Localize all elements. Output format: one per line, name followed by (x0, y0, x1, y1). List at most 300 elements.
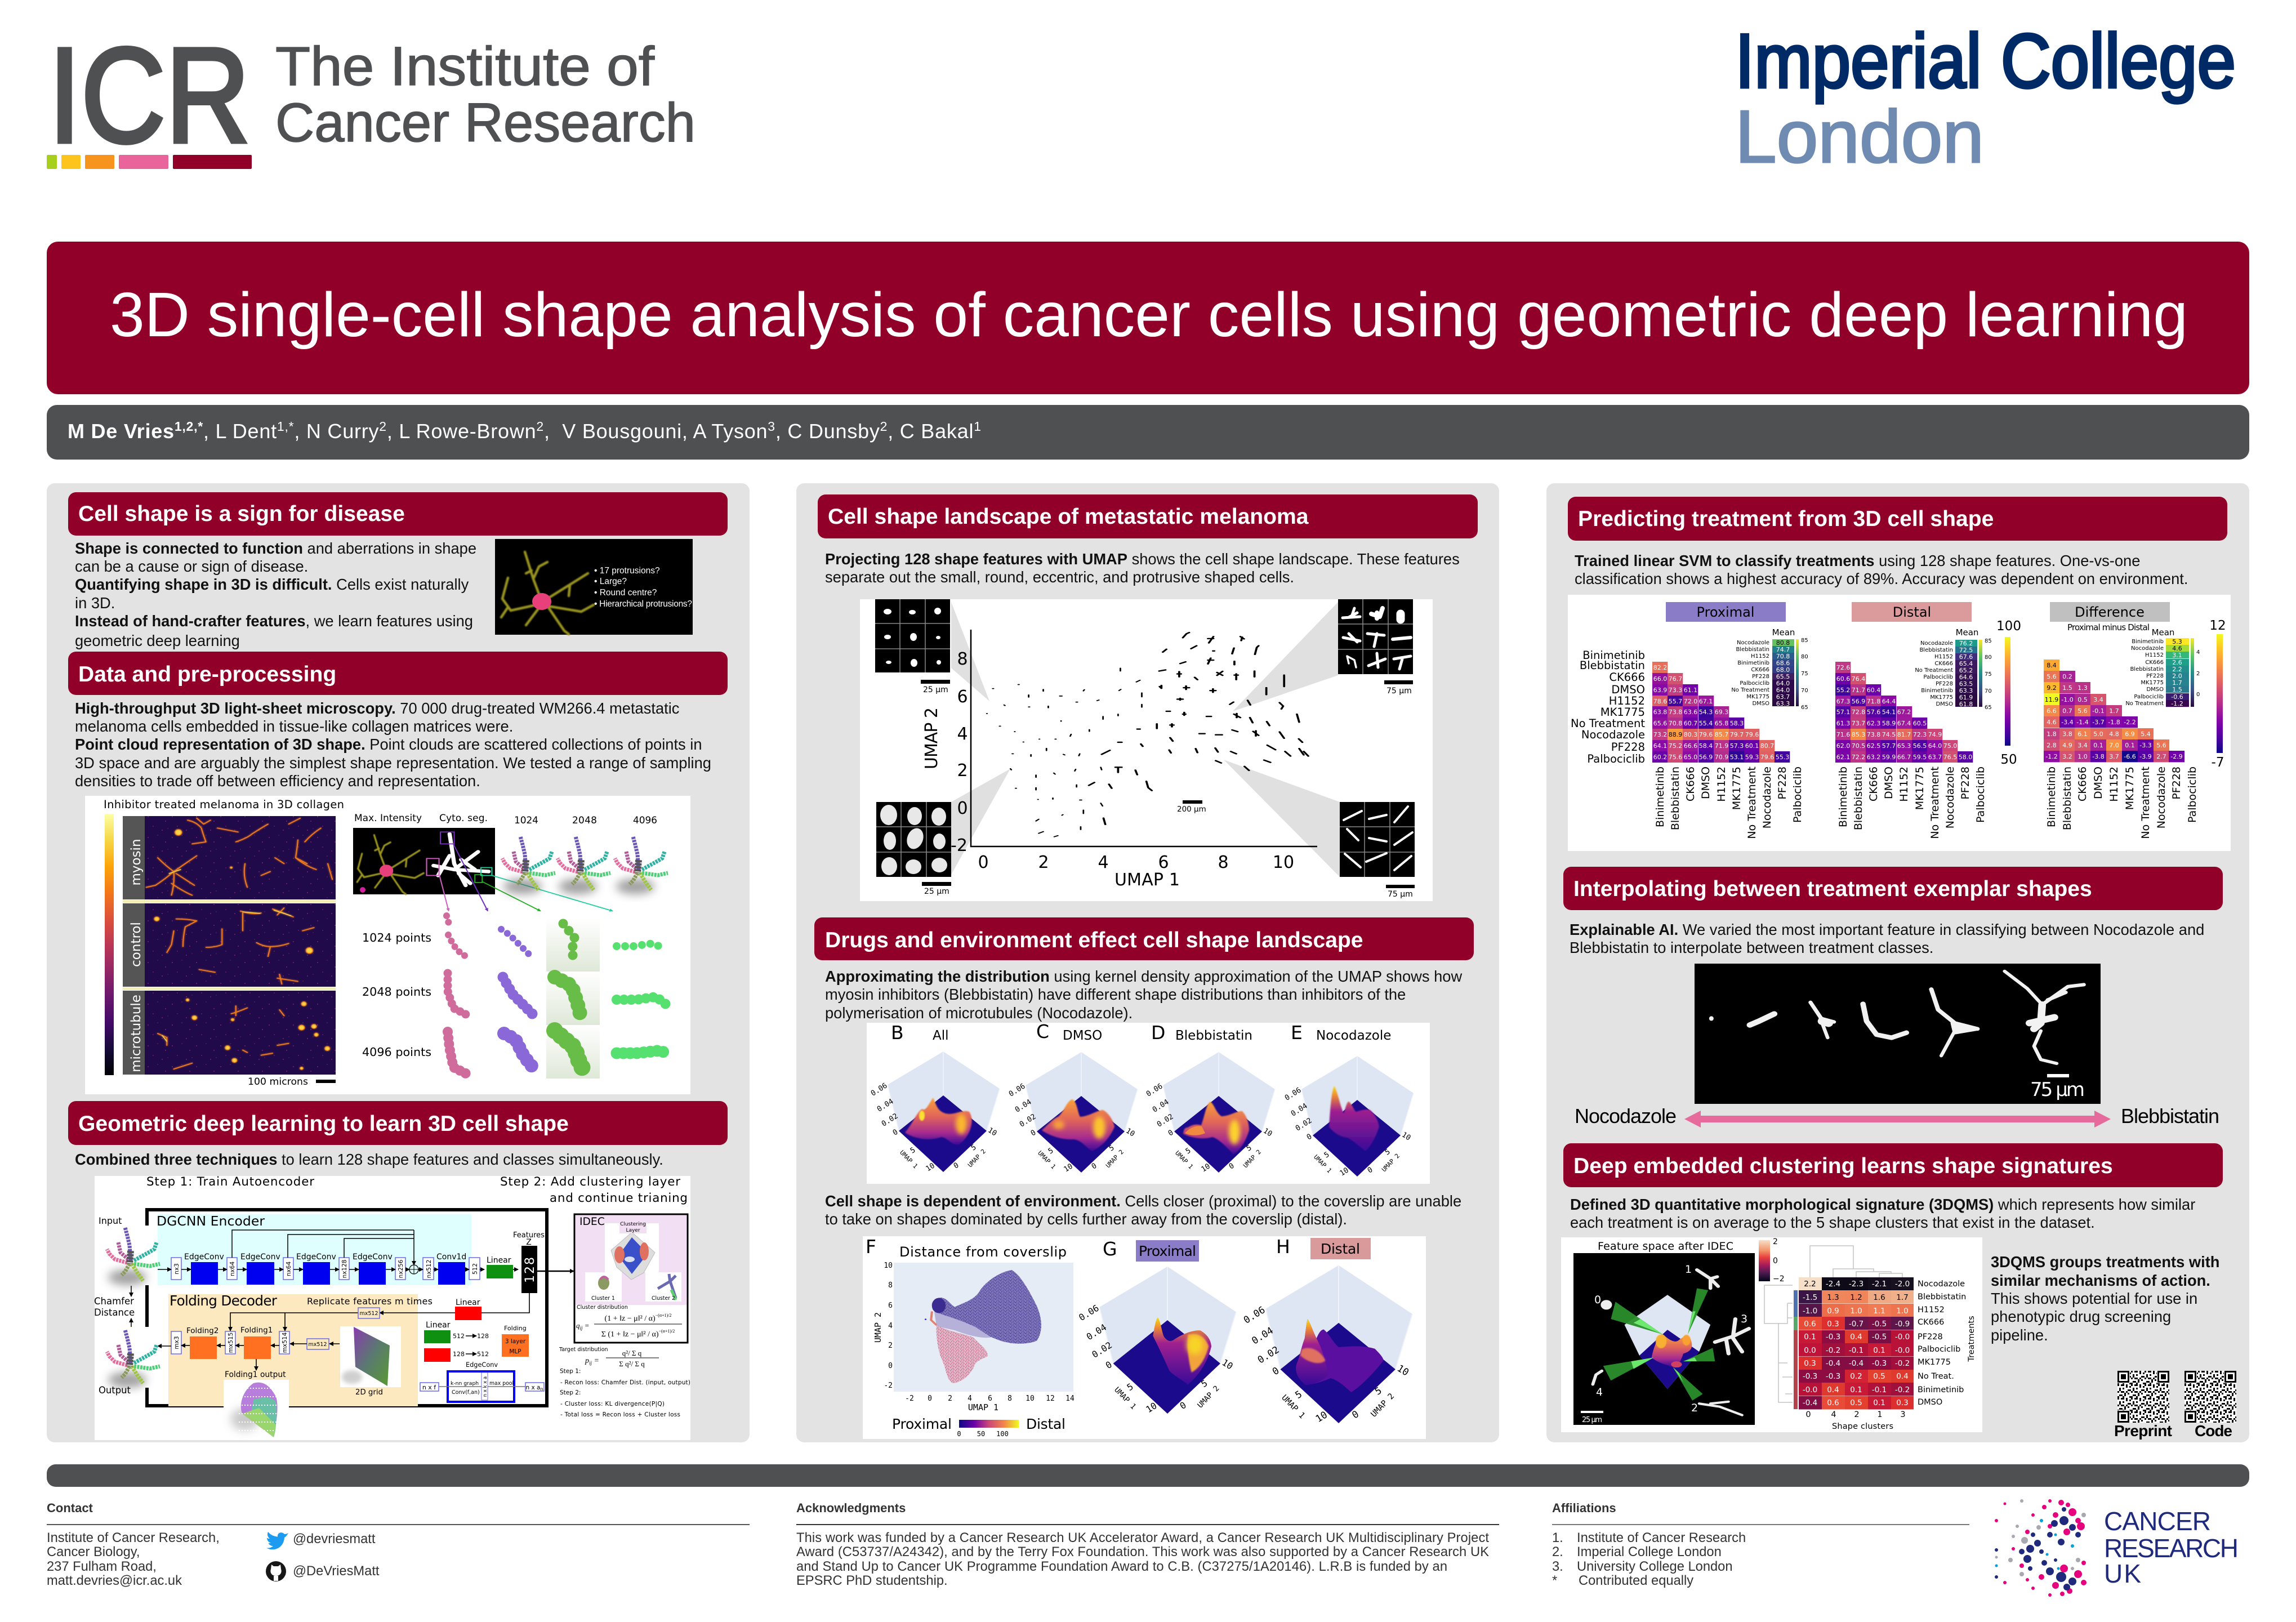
plot F: distance from coverslip: UMAP 1 (968, 1402, 998, 1412)
mean table: distal: Palbociclib (1923, 674, 1953, 680)
column labels: difference: Palbociclib (2186, 767, 2199, 823)
step labels: Step 1: Train Autoencoder (146, 1175, 314, 1189)
IDEC block: −(α+1)/2 (659, 1329, 675, 1334)
plot B: all (870, 1051, 1000, 1174)
tick labels: -2 (951, 836, 968, 855)
plot labels (891, 1021, 1391, 1044)
text: SVM: Trained linear SVM to classify treatments using 128 shape features. One-vs-one (1575, 552, 2140, 569)
text: cell shape intro: Shape is connected to function and aberrations in shape (75, 540, 476, 557)
heatmap: distal: 85.3 (1852, 731, 1865, 738)
condition labels: Difference (2075, 604, 2145, 620)
heatmap: distal: 62.3 (1867, 720, 1880, 727)
mean table: distal: DMSO (1936, 701, 1953, 707)
footer: contact: Institute of Cancer Research, (47, 1531, 220, 1545)
heatmap: 3DQMS: 0.3 (1804, 1359, 1816, 1368)
plot H: distal: 0 (1350, 1409, 1361, 1421)
text: distribution: polymerisation of microtubules (Nocodazole). (825, 1004, 1133, 1022)
heatmap: 3DQMS: -0.0 (1803, 1385, 1817, 1394)
encoder block: nx64 (229, 1262, 236, 1276)
tick labels: 8 (957, 649, 968, 669)
plot D: Blebbistatin: 0.04 (1151, 1098, 1171, 1115)
figure: microscopy and point clouds (85, 796, 690, 1094)
mean table: distal: 75 (1985, 671, 1992, 678)
IDEC block: = (583, 1321, 590, 1330)
plot H: distal: 0.04 (1250, 1325, 1276, 1347)
thumbnails: elongated cells (1340, 802, 1415, 899)
row labels: Binimetinib (1582, 649, 1645, 662)
title banner: 3D single-cell shape analysis of cancer cells using geometric deep learning (110, 280, 2188, 350)
heatmap: 3DQMS: 1.0 (1896, 1307, 1909, 1316)
mean table: difference: -0.6 (2171, 693, 2183, 701)
text: environment: to take on shapes dominated by cells further away from the coverslip (distal). (825, 1210, 1347, 1228)
feature space plot: 25 µm (1582, 1416, 1602, 1424)
heatmap: 3DQMS: -0.2 (1895, 1359, 1910, 1368)
figure title: Inhibitor treated melanoma in 3D collagen (104, 798, 344, 811)
colour bar: difference: -7 (2212, 755, 2224, 770)
heatmap: distal: 66.7 (1897, 754, 1911, 761)
feature space plot: 4 (1596, 1386, 1603, 1398)
column labels (354, 813, 657, 826)
text: distribution: Approximating the distribution using kernel density approximation of the UMAP shows how (825, 968, 1462, 985)
row labels: H1152 (1609, 694, 1645, 707)
heading: cell shape: Cell shape is a sign for disease (78, 502, 405, 526)
plot G: proximal: 0 (1104, 1359, 1114, 1371)
plot H: distal: 10 (1314, 1409, 1330, 1425)
heatmap: distal: 72.8 (1852, 708, 1865, 716)
plot labels: E (1291, 1022, 1303, 1044)
image: max intensity and segmentation (353, 828, 613, 911)
tick labels: 10 (1273, 853, 1294, 872)
heatmap: distal: 73.7 (1852, 720, 1865, 727)
authors bar: 2 (536, 419, 543, 434)
text: cell shape intro: can be a cause or sign of disease. (75, 558, 308, 575)
plot C: DMSO: 0 (1090, 1162, 1098, 1171)
heatmap: 3DQMS: 0.1 (1873, 1398, 1885, 1407)
heatmap: 3DQMS: 2.2 (1804, 1280, 1816, 1289)
step labels (146, 1175, 688, 1205)
step labels: Step 2: Add clustering layer (500, 1175, 680, 1189)
mean table: distal: Mean (1956, 627, 1978, 638)
heatmap: distal: 67.2 (1897, 708, 1911, 716)
plot B: all: 0.06 (870, 1081, 889, 1098)
column labels: proximal: MK1775 (1731, 767, 1743, 810)
column labels: distal: MK1775 (1914, 767, 1926, 810)
heatmap: difference: 3.8 (2062, 730, 2072, 738)
heatmap: distal: 67.4 (1897, 720, 1911, 727)
row labels: point counts: 1024 points (362, 931, 431, 944)
column labels: distal (1837, 767, 1987, 839)
input and output point clouds: Output (99, 1385, 131, 1396)
heatmap: difference: 1.7 (2109, 707, 2119, 715)
logo: Imperial College London: London (1735, 95, 1984, 178)
figure: clustering and signature heatmap (1561, 1237, 1982, 1432)
mean table: difference: 4 (2196, 649, 2200, 656)
heatmap: proximal: 79.6 (1745, 731, 1759, 738)
heatmap: proximal: 54.3 (1699, 708, 1713, 716)
footer: contact: 237 Fulham Road, (47, 1559, 157, 1574)
heatmap: difference: 1.3 (2077, 684, 2088, 692)
colour bar: rocket (1759, 1237, 1785, 1284)
plot G: proximal: Proximal (1139, 1243, 1196, 1259)
plot B: all: 0.02 (880, 1112, 899, 1129)
row labels: myosin, control, microtubule (129, 839, 144, 1072)
panel: centre column (796, 483, 1499, 1442)
mean table: difference: 2.6 (2172, 659, 2182, 666)
mean table: proximal: PF228 (1752, 674, 1769, 680)
figure: environment plots F to H (863, 1236, 1426, 1439)
heatmap labels: Palbociclib (1918, 1345, 1960, 1354)
plot G: proximal: 0.04 (1085, 1322, 1108, 1342)
decoder block: Linear (456, 1298, 480, 1307)
heatmap: proximal: 53.1 (1730, 754, 1744, 761)
colour bar: difference: 12 (2209, 618, 2226, 633)
mean table: distal: 64.6 (1959, 674, 1973, 681)
plot C: DMSO: UMAP 1 (1036, 1149, 1057, 1170)
heatmap: proximal: 63.8 (1653, 708, 1667, 716)
heatmap: 3DQMS: 0.5 (1873, 1372, 1885, 1381)
text: environment (825, 1192, 1461, 1228)
loss equations: p (585, 1357, 589, 1365)
mean table: difference: No Treatment (2125, 701, 2164, 707)
2D grid (340, 1326, 401, 1397)
mean table: proximal: No Treatment (1731, 687, 1769, 693)
authors bar: , N Curry (294, 420, 379, 443)
heatmap: difference: 1.5 (2062, 684, 2072, 692)
mean table: difference: CK666 (2145, 660, 2164, 666)
plot F: distance from coverslip: 14 (1065, 1394, 1075, 1403)
input and output point clouds: Input (99, 1215, 122, 1226)
mean table: proximal (1731, 627, 1808, 711)
column labels: difference (2045, 767, 2199, 839)
heatmap: difference: 0.7 (2062, 707, 2072, 715)
heatmap: 3DQMS: -0.0 (1895, 1333, 1910, 1342)
scatter of cell silhouettes (987, 632, 1308, 837)
plot E: Nocodazole: 0 (1305, 1133, 1313, 1142)
legend: linear, folding, edgeconv: Folding (504, 1325, 527, 1332)
heatmap: 3DQMS: 1.1 (1873, 1307, 1885, 1316)
feature space plot: 0 (1594, 1294, 1601, 1306)
footer: affiliations: * (1552, 1574, 1557, 1588)
mean table: proximal: 68.0 (1776, 666, 1790, 674)
mean table: difference (2125, 627, 2200, 707)
plot C: DMSO: 0.02 (1018, 1112, 1037, 1129)
heatmap: difference: 2.7 (2156, 753, 2166, 760)
heatmap: 3DQMS: 0.3 (1827, 1320, 1839, 1329)
plot E: Nocodazole: UMAP 2 (1380, 1152, 1401, 1173)
heatmap: distal: 71.7 (1852, 687, 1865, 694)
heatmap labels: CK666 (1918, 1318, 1944, 1327)
heatmap: difference: 5.6 (2077, 707, 2088, 715)
thumbnails: protrusive cells: 75 µm (1386, 687, 1412, 696)
heatmap: 3DQMS: -1.5 (1803, 1293, 1817, 1302)
image: fluorescent cell with questions: • Round centre? (594, 588, 657, 598)
decoder block: mx515 (228, 1333, 234, 1353)
mean table: proximal: 64.0 (1776, 680, 1790, 687)
heatmap: proximal: 79.6 (1760, 754, 1774, 761)
text: 3DQMS groups treatments: pipeline. (1991, 1326, 2048, 1344)
text: SVM (1575, 552, 2188, 587)
logo: The Institute of Cancer Research: ICR (48, 20, 250, 171)
heatmap: proximal: 70.9 (1715, 754, 1728, 761)
row labels: CK666 (1609, 671, 1645, 684)
heatmap: difference: 7.0 (2109, 742, 2119, 749)
plot G: proximal: UMAP 2 (1196, 1384, 1221, 1410)
plot H: distal: 0.02 (1256, 1344, 1281, 1366)
callout wedges (951, 602, 1340, 877)
text: distribution: myosin inhibitors (Blebbistatin) have different shape distributions than inhibitors of the (825, 986, 1406, 1003)
arrow: Nocodazole to Blebbistatin (1575, 1104, 2219, 1128)
heatmap: proximal: 55.3 (1776, 754, 1789, 761)
text: SVM: classification shows a highest accuracy of 89%. Accuracy was dependent on environment. (1575, 570, 2188, 587)
row labels: MK1775 (1600, 706, 1645, 719)
heatmap: proximal: 82.2 (1653, 664, 1667, 671)
heatmap: difference (2044, 660, 2184, 762)
mean table: proximal: Blebbistatin (1736, 647, 1769, 653)
heatmap: proximal (1652, 662, 1790, 763)
plot B: all: 0 (952, 1161, 960, 1170)
feature space plot: Feature space after IDEC (1598, 1240, 1733, 1253)
plot F: distance from coverslip: 10 (1026, 1394, 1035, 1403)
thumbnails: small cells (875, 599, 950, 694)
mean table: distal: PF228 (1936, 681, 1953, 687)
plot G: proximal: UMAP 1 (1112, 1386, 1138, 1411)
row labels (1571, 649, 1645, 765)
column labels: 1024 (514, 815, 538, 826)
heatmap: 3DQMS: 1.3 (1827, 1293, 1839, 1302)
heatmap: proximal: 80.7 (1760, 742, 1774, 750)
heatmap: proximal: 80.3 (1684, 731, 1697, 738)
row labels: myosin, control, microtubule: microtubule (129, 995, 144, 1072)
plot H: distal: 0.06 (1242, 1304, 1267, 1326)
plot D: Blebbistatin: UMAP 1 (1174, 1149, 1194, 1170)
heatmap: distal: 63.7 (1928, 754, 1942, 761)
plot H: distal: 5 (1373, 1385, 1384, 1398)
text: 3DQMS groups treatments: phenotypic drug screening (1991, 1308, 2171, 1325)
input and output point clouds: Distance (94, 1307, 135, 1318)
heatmap: proximal: 65.8 (1715, 720, 1728, 727)
plot G: proximal: 10 (1220, 1357, 1235, 1371)
mean table: distal: 61.9 (1959, 694, 1973, 701)
axis titles: UMAP 1 (1114, 870, 1180, 890)
legend: linear, folding, edgeconv: k-nn graph (451, 1380, 479, 1387)
legend: linear, folding, edgeconv: max pool (489, 1380, 514, 1387)
mean table: difference: Mean (2152, 627, 2174, 638)
colour bar: rocket: −2 (1773, 1275, 1785, 1284)
heatmap: proximal: 60.7 (1684, 720, 1697, 727)
heatmap: distal: 57.6 (1867, 708, 1880, 716)
plot C: DMSO: 5 (1047, 1147, 1055, 1156)
plot C: DMSO: 10 (1124, 1127, 1136, 1139)
heatmap: difference: 3.7 (2109, 753, 2119, 760)
heatmap: proximal: 63.6 (1684, 708, 1697, 716)
QR code: code: Code (2195, 1422, 2232, 1440)
plot F: distance from coverslip: Distance from coverslip (899, 1244, 1067, 1260)
heading: data (68, 652, 728, 695)
text: combined techniques: Combined three techniques to learn 128 shape features and classes simultaneously. (75, 1151, 663, 1168)
column labels: proximal: CK666 (1684, 767, 1697, 801)
heatmap: distal: 54.1 (1882, 708, 1896, 716)
text: UMAP projection (825, 550, 1460, 586)
loss equations: - Cluster loss: KL divergence(P|Q) (560, 1401, 665, 1407)
plot C: DMSO (1007, 1052, 1138, 1174)
plot F: distance from coverslip: 50 (977, 1430, 985, 1438)
plot F: distance from coverslip: -2 (884, 1382, 893, 1390)
column labels: difference: Nocodazole (2155, 767, 2168, 828)
heatmap: distal: 57.1 (1836, 708, 1850, 716)
heatmap: distal: 56.5 (1913, 742, 1927, 750)
plot C: DMSO: 5 (1108, 1144, 1116, 1153)
legend: linear, folding, edgeconv: Conv(f,an) (452, 1389, 480, 1396)
encoder block: nx128 (341, 1260, 348, 1278)
mean table: distal: H1152 (1934, 654, 1953, 660)
heading: cell shape (68, 492, 728, 536)
tick labels: 4 (1098, 853, 1109, 872)
icon: Twitter (266, 1532, 288, 1549)
plot H: distal: H (1276, 1236, 1290, 1258)
heatmap: proximal: 55.7 (1669, 698, 1682, 705)
heatmap: distal: 58.9 (1882, 720, 1896, 727)
column labels: distal: PF228 (1959, 767, 1972, 800)
authors bar: , C Bakal (888, 420, 973, 443)
authors bar: , C Dunsby (775, 420, 880, 443)
colour bar: proximal and distal: 50 (2000, 752, 2017, 767)
plot D: Blebbistatin: 0.06 (1145, 1082, 1164, 1099)
column labels: proximal: Nocodazole (1761, 767, 1773, 828)
heatmap: distal: 59.5 (1913, 754, 1927, 761)
mean table: proximal: MK1775 (1746, 694, 1769, 700)
plot C: DMSO: UMAP 2 (1104, 1148, 1125, 1169)
plot labels: C (1036, 1021, 1049, 1042)
tick labels: 2 (957, 761, 968, 781)
text: cell shape intro: Quantifying shape in 3D is difficult. Cells exist naturally (75, 576, 469, 593)
heatmap labels: 2 (1854, 1410, 1860, 1419)
heatmap: difference: 0.5 (2077, 696, 2088, 703)
legend: linear, folding, edgeconv: 512 (477, 1351, 489, 1358)
text: cell shape intro: Instead of hand-crafter features, we learn features using (75, 612, 473, 630)
footer: acknowledgments: and Stand Up to Cancer UK Programme Foundation Award to C.B. (C37275/1A20146). L.R.B is funded by an (796, 1559, 1447, 1574)
input and output point clouds (94, 1215, 160, 1396)
plot C: DMSO: 0.06 (1007, 1082, 1027, 1099)
heatmap: proximal: 71.9 (1715, 742, 1728, 750)
heatmap: difference: -1.2 (2045, 753, 2058, 760)
footer: contact: Contact (47, 1501, 93, 1515)
legend: linear, folding, edgeconv: 128 (453, 1351, 465, 1358)
mean table: difference: 4.6 (2172, 645, 2182, 652)
legend: linear, folding, edgeconv (420, 1321, 544, 1402)
heatmap: distal: 58.0 (1959, 754, 1972, 761)
heatmap labels: Nocodazole (1918, 1280, 1965, 1289)
text: 3DQMS groups treatments: similar mechanisms of action. (1991, 1272, 2210, 1289)
heatmap: 3DQMS: -0.7 (1849, 1320, 1863, 1329)
mean table: proximal: 74.7 (1776, 646, 1790, 653)
mean table: distal: No Treatment (1915, 667, 1953, 674)
plot E: Nocodazole: 0.06 (1283, 1086, 1303, 1103)
heatmap: proximal: 69.3 (1715, 708, 1728, 716)
column labels: proximal: No Treatment (1746, 767, 1758, 839)
mean table: proximal: H1152 (1751, 653, 1769, 660)
heatmap: difference: -3.3 (2139, 742, 2152, 749)
mean table: difference: DMSO (2146, 687, 2164, 693)
heatmap: difference: -2.9 (2170, 753, 2183, 760)
heatmap: proximal: 73.2 (1653, 731, 1667, 738)
plot D: Blebbistatin: UMAP 2 (1242, 1148, 1263, 1169)
plot G: proximal: G (1103, 1238, 1117, 1260)
heatmap labels: MK1775 (1918, 1358, 1951, 1367)
mean table: distal: 65.4 (1959, 660, 1973, 667)
heatmap: 3DQMS: -0.0 (1895, 1346, 1910, 1355)
mean table: proximal: Binimetinib (1737, 660, 1769, 666)
logo: Cancer Research UK: CANCER (2104, 1507, 2211, 1536)
plot E: Nocodazole: 5 (1323, 1151, 1331, 1160)
heatmap: proximal: 60.2 (1653, 754, 1667, 761)
plot B: all: UMAP 2 (966, 1148, 987, 1169)
mean table: difference: MK1775 (2141, 680, 2164, 686)
plot labels: B (891, 1022, 904, 1044)
heatmap: difference: -2.2 (2124, 719, 2136, 726)
authors bar: 1,2,* (175, 419, 203, 434)
encoder block: nx3 (173, 1263, 180, 1275)
text: explainable AI: Blebbistatin to interpolate between treatment classes. (1570, 939, 1933, 956)
plot C: DMSO: 0.04 (1014, 1098, 1033, 1115)
heatmap: distal: 57.7 (1882, 742, 1896, 750)
plot F: distance from coverslip: 100 (996, 1430, 1009, 1438)
plot labels: Nocodazole (1316, 1028, 1391, 1043)
authors bar: 3 (768, 419, 775, 434)
text: distribution (825, 968, 1462, 1022)
column labels: proximal: DMSO (1700, 767, 1712, 799)
axis titles (922, 707, 1180, 890)
logo: Imperial College London (1735, 18, 2236, 178)
authors bar: , L Dent (203, 420, 277, 443)
footer: contact (47, 1501, 750, 1588)
heatmap: 3DQMS: -2.1 (1872, 1280, 1887, 1289)
footer: affiliations: 2. (1552, 1545, 1563, 1559)
mean table: proximal: 70.8 (1776, 653, 1790, 660)
zoomed protrusions: pink, purple, green, light green (447, 916, 667, 1079)
row labels: No Treatment (1571, 717, 1645, 730)
plot H: distal: UMAP 2 (1370, 1392, 1396, 1419)
plot labels: DMSO (1063, 1028, 1102, 1043)
heatmap: 3DQMS: -0.4 (1803, 1398, 1817, 1407)
heatmap: distal: 62.1 (1836, 754, 1850, 761)
column labels: difference: Binimetinib (2045, 767, 2058, 827)
heatmap: difference: -3.7 (2092, 719, 2105, 726)
plot G: proximal: 0.06 (1077, 1303, 1101, 1323)
latent features Z: 128 (523, 1256, 537, 1283)
decoder block: Replicate features m times (307, 1296, 433, 1307)
heatmap: distal (1835, 662, 1973, 763)
plot E: Nocodazole: 0.02 (1294, 1116, 1313, 1133)
plot F: distance from coverslip: 0 (928, 1394, 932, 1403)
heatmap: 3DQMS: 0.4 (1850, 1333, 1862, 1342)
IDEC block: q (576, 1321, 580, 1330)
mean table: distal: 80 (1985, 654, 1992, 661)
heading: landscape (818, 494, 1478, 538)
heatmap: proximal: 75.2 (1669, 742, 1682, 750)
heatmap labels: PF228 (1918, 1333, 1943, 1342)
heatmap: distal: 60.5 (1913, 720, 1927, 727)
column labels: proximal: Palbociclib (1791, 767, 1804, 823)
authors bar (47, 405, 2249, 460)
step labels: and continue trianing (550, 1191, 688, 1205)
encoder block: nx64 (286, 1262, 292, 1276)
mean table: difference: Palbociclib (2134, 694, 2164, 700)
authors bar: , V Bousgouni, A Tyson (544, 420, 768, 443)
heatmap: difference: -1.4 (2076, 719, 2089, 726)
heatmap labels: 3 (1900, 1410, 1906, 1419)
plot F: distance from coverslip: 10 (884, 1262, 893, 1270)
heatmap: proximal: 65.6 (1653, 720, 1667, 727)
